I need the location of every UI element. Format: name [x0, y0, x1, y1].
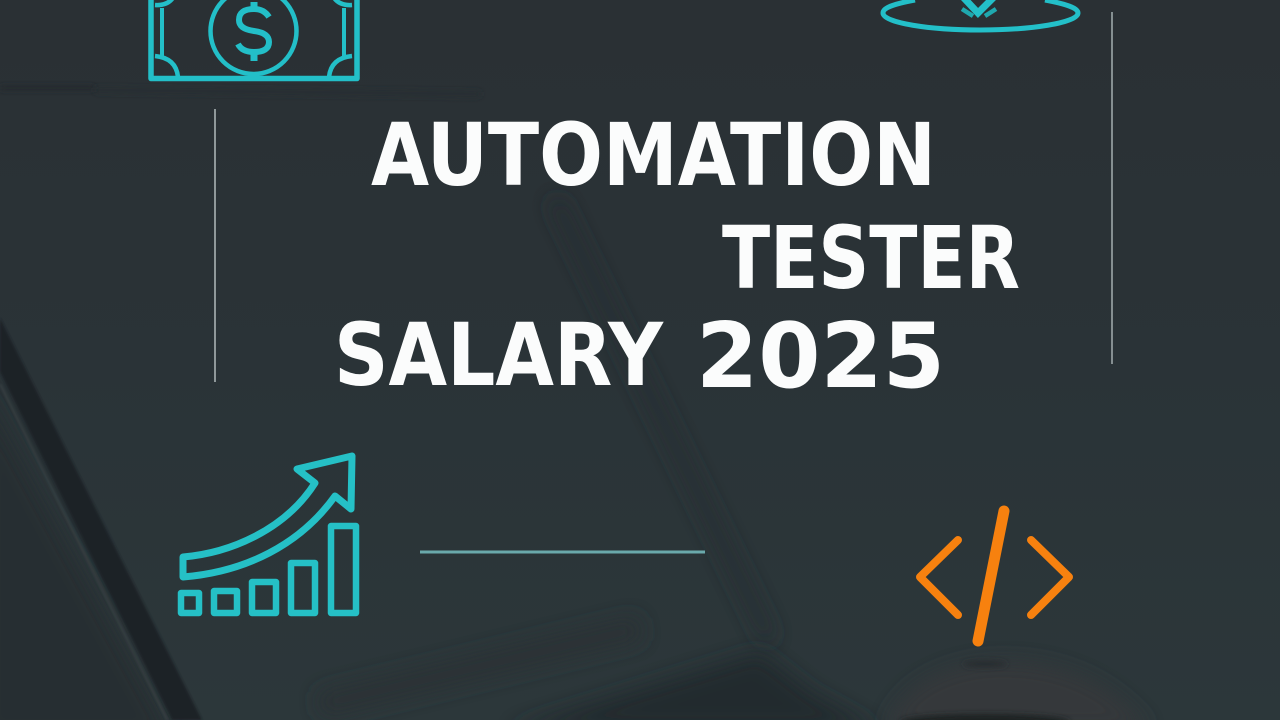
icon: download target ellipse: [883, 0, 1078, 30]
title: TESTER: [722, 209, 1020, 309]
title: 2025: [696, 304, 945, 409]
icon: growth chart with rising arrow: [181, 456, 356, 613]
title: SALARY: [334, 306, 664, 406]
right vertical divider: [1111, 12, 1113, 364]
horizontal accent line: [420, 550, 705, 554]
icon: orange code brackets: [920, 511, 1069, 641]
icon: dollar banknote: [151, 0, 357, 78]
left vertical divider: [214, 109, 216, 382]
title: AUTOMATION: [371, 106, 936, 206]
title: [334, 106, 1020, 409]
